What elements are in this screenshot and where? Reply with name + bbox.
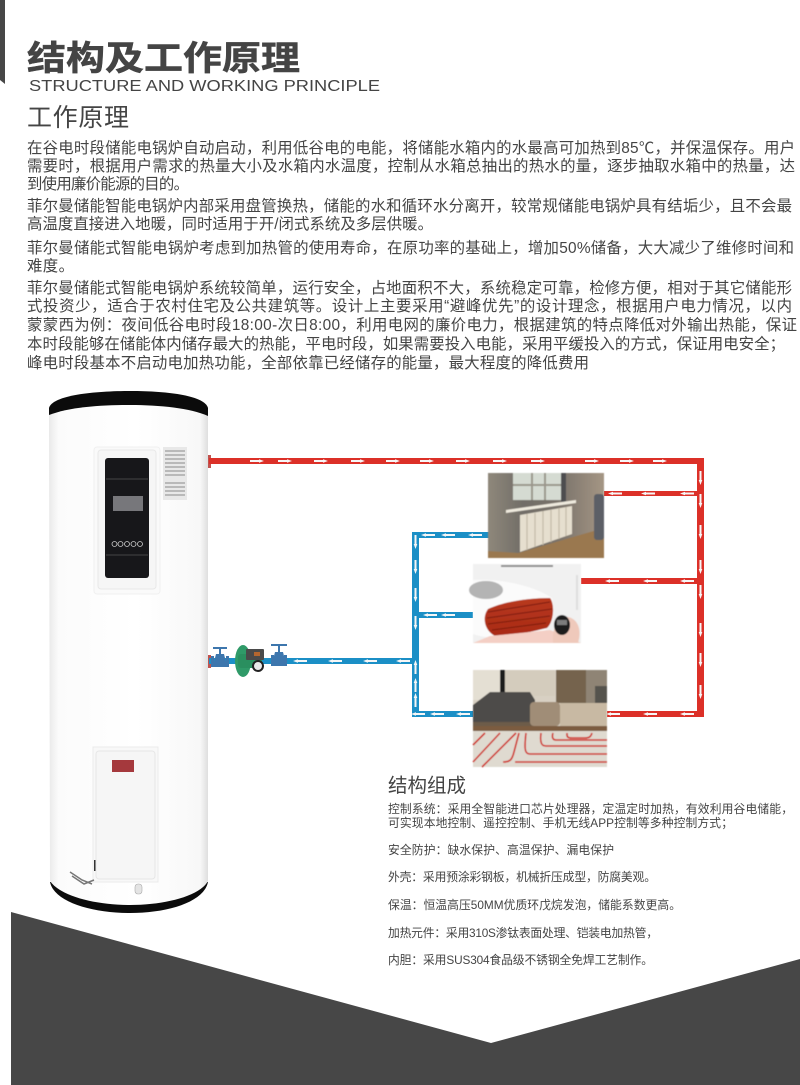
paragraph 4 xyxy=(27,279,797,372)
photo: radiator room xyxy=(488,473,604,558)
paragraph 4: 峰电时段基本不启动电加热功能，全部依靠已经储存的能量，最大程度的降低费用 xyxy=(27,354,589,372)
tank bottom base xyxy=(50,882,208,913)
hot water supply pipes (red) xyxy=(208,455,704,717)
spec label xyxy=(163,447,187,500)
circulation pump xyxy=(235,645,264,677)
paragraph 1: 需要时，根据用户需求的热量大小及水箱内水温度，控制从水箱总抽出的热水的量，逐步抽取水箱中的热量，达 xyxy=(27,157,795,175)
item: heating element: 加热元件：采用310S渗钛表面处理、铠装电加热管， xyxy=(388,926,658,940)
text block: working principle paragraphs xyxy=(27,139,797,372)
paragraph 1: 在谷电时段储能电锅炉自动启动，利用低谷电的电能，将储能水箱内的水最高可加热到85℃，并保温保存。用户 xyxy=(27,139,795,157)
item: inner tank: 内胆：采用SUS304食品级不锈钢全免焊工艺制作。 xyxy=(388,953,653,967)
corner accent bar xyxy=(0,0,5,84)
wiring and cable gland xyxy=(70,872,142,894)
paragraph 4: 本时段能够在储能体内储存最大的热能，平电时段，如果需要投入电能，采用平缓投入的方式，保证用电安全； xyxy=(27,335,785,353)
water tank product xyxy=(49,391,208,913)
paragraph 4: 菲尔曼储能式智能电锅炉系统较简单，运行安全，占地面积不大，系统稳定可靠，检修方便，相对于其它储能形 xyxy=(27,279,792,297)
section: structure composition xyxy=(388,769,793,967)
paragraph 3 xyxy=(27,239,794,275)
valve right xyxy=(271,644,287,666)
tank top cap xyxy=(49,391,208,418)
flow arrows on return pipes xyxy=(293,533,482,716)
paragraph 2 xyxy=(27,196,792,233)
return water pipes (blue) xyxy=(208,532,489,717)
paragraph 1 xyxy=(27,139,795,193)
item: safety protection: 安全防护：缺水保护、高温保护、漏电保护 xyxy=(388,843,614,857)
heading: 结构组成 xyxy=(388,769,466,798)
tank body xyxy=(49,405,208,905)
paragraph 4: 蒙蒙西为例：夜间低谷电时段18:00-次日8:00，利用电网的廉价电力，根据建筑的特点降低对外输出热能，保证 xyxy=(27,316,797,334)
section heading: working principle: 工作原理 xyxy=(27,98,129,134)
photo: electric fan heater xyxy=(469,564,581,643)
item: shell: 外壳：采用预涂彩钢板，机械折压成型，防腐美观。 xyxy=(388,870,656,884)
control panel xyxy=(94,447,160,594)
paragraph 1: 到使用廉价能源的目的。 xyxy=(27,175,189,193)
title: 结构及工作原理 xyxy=(27,31,300,80)
paragraph 2: 高温度直接进入地暖，同时适用于开/闭式系统及多层供暖。 xyxy=(27,215,433,233)
lower access cover xyxy=(93,747,158,882)
paragraph 3: 难度。 xyxy=(27,257,74,275)
paragraph 4: 式投资少，适合于农村住宅及公共建筑等。设计上主要采用“避峰优先”的设计理念，根据用户电力情况，以内 xyxy=(27,296,792,315)
bottom dark chevron band xyxy=(11,912,800,1085)
item: control system xyxy=(388,802,793,830)
paragraph 3: 菲尔曼储能式智能电锅炉考虑到加热管的使用寿命，在原功率的基础上，增加50%储备，大大减少了维修时间和 xyxy=(27,239,794,257)
english subtitle: STRUCTURE AND WORKING PRINCIPLE xyxy=(29,78,380,95)
flow arrows on hot pipes xyxy=(250,459,702,716)
item: control system: 控制系统：采用全智能进口芯片处理器，定温定时加热，有效利用谷电储能， xyxy=(388,802,793,816)
item: control system: 可实现本地控制、遥控控制、手机无线APP控制等多种控制方式； xyxy=(388,816,733,830)
valve left xyxy=(211,647,229,667)
paragraph 2: 菲尔曼储能智能电锅炉内部采用盘管换热，储能的水和循环水分离开，较常规储能电锅炉具有结垢少，且不会最 xyxy=(27,196,792,215)
photo: bedroom underfloor heating xyxy=(473,670,607,767)
item: insulation: 保温：恒温高压50MM优质环戊烷发泡，储能系数更高。 xyxy=(388,898,681,912)
